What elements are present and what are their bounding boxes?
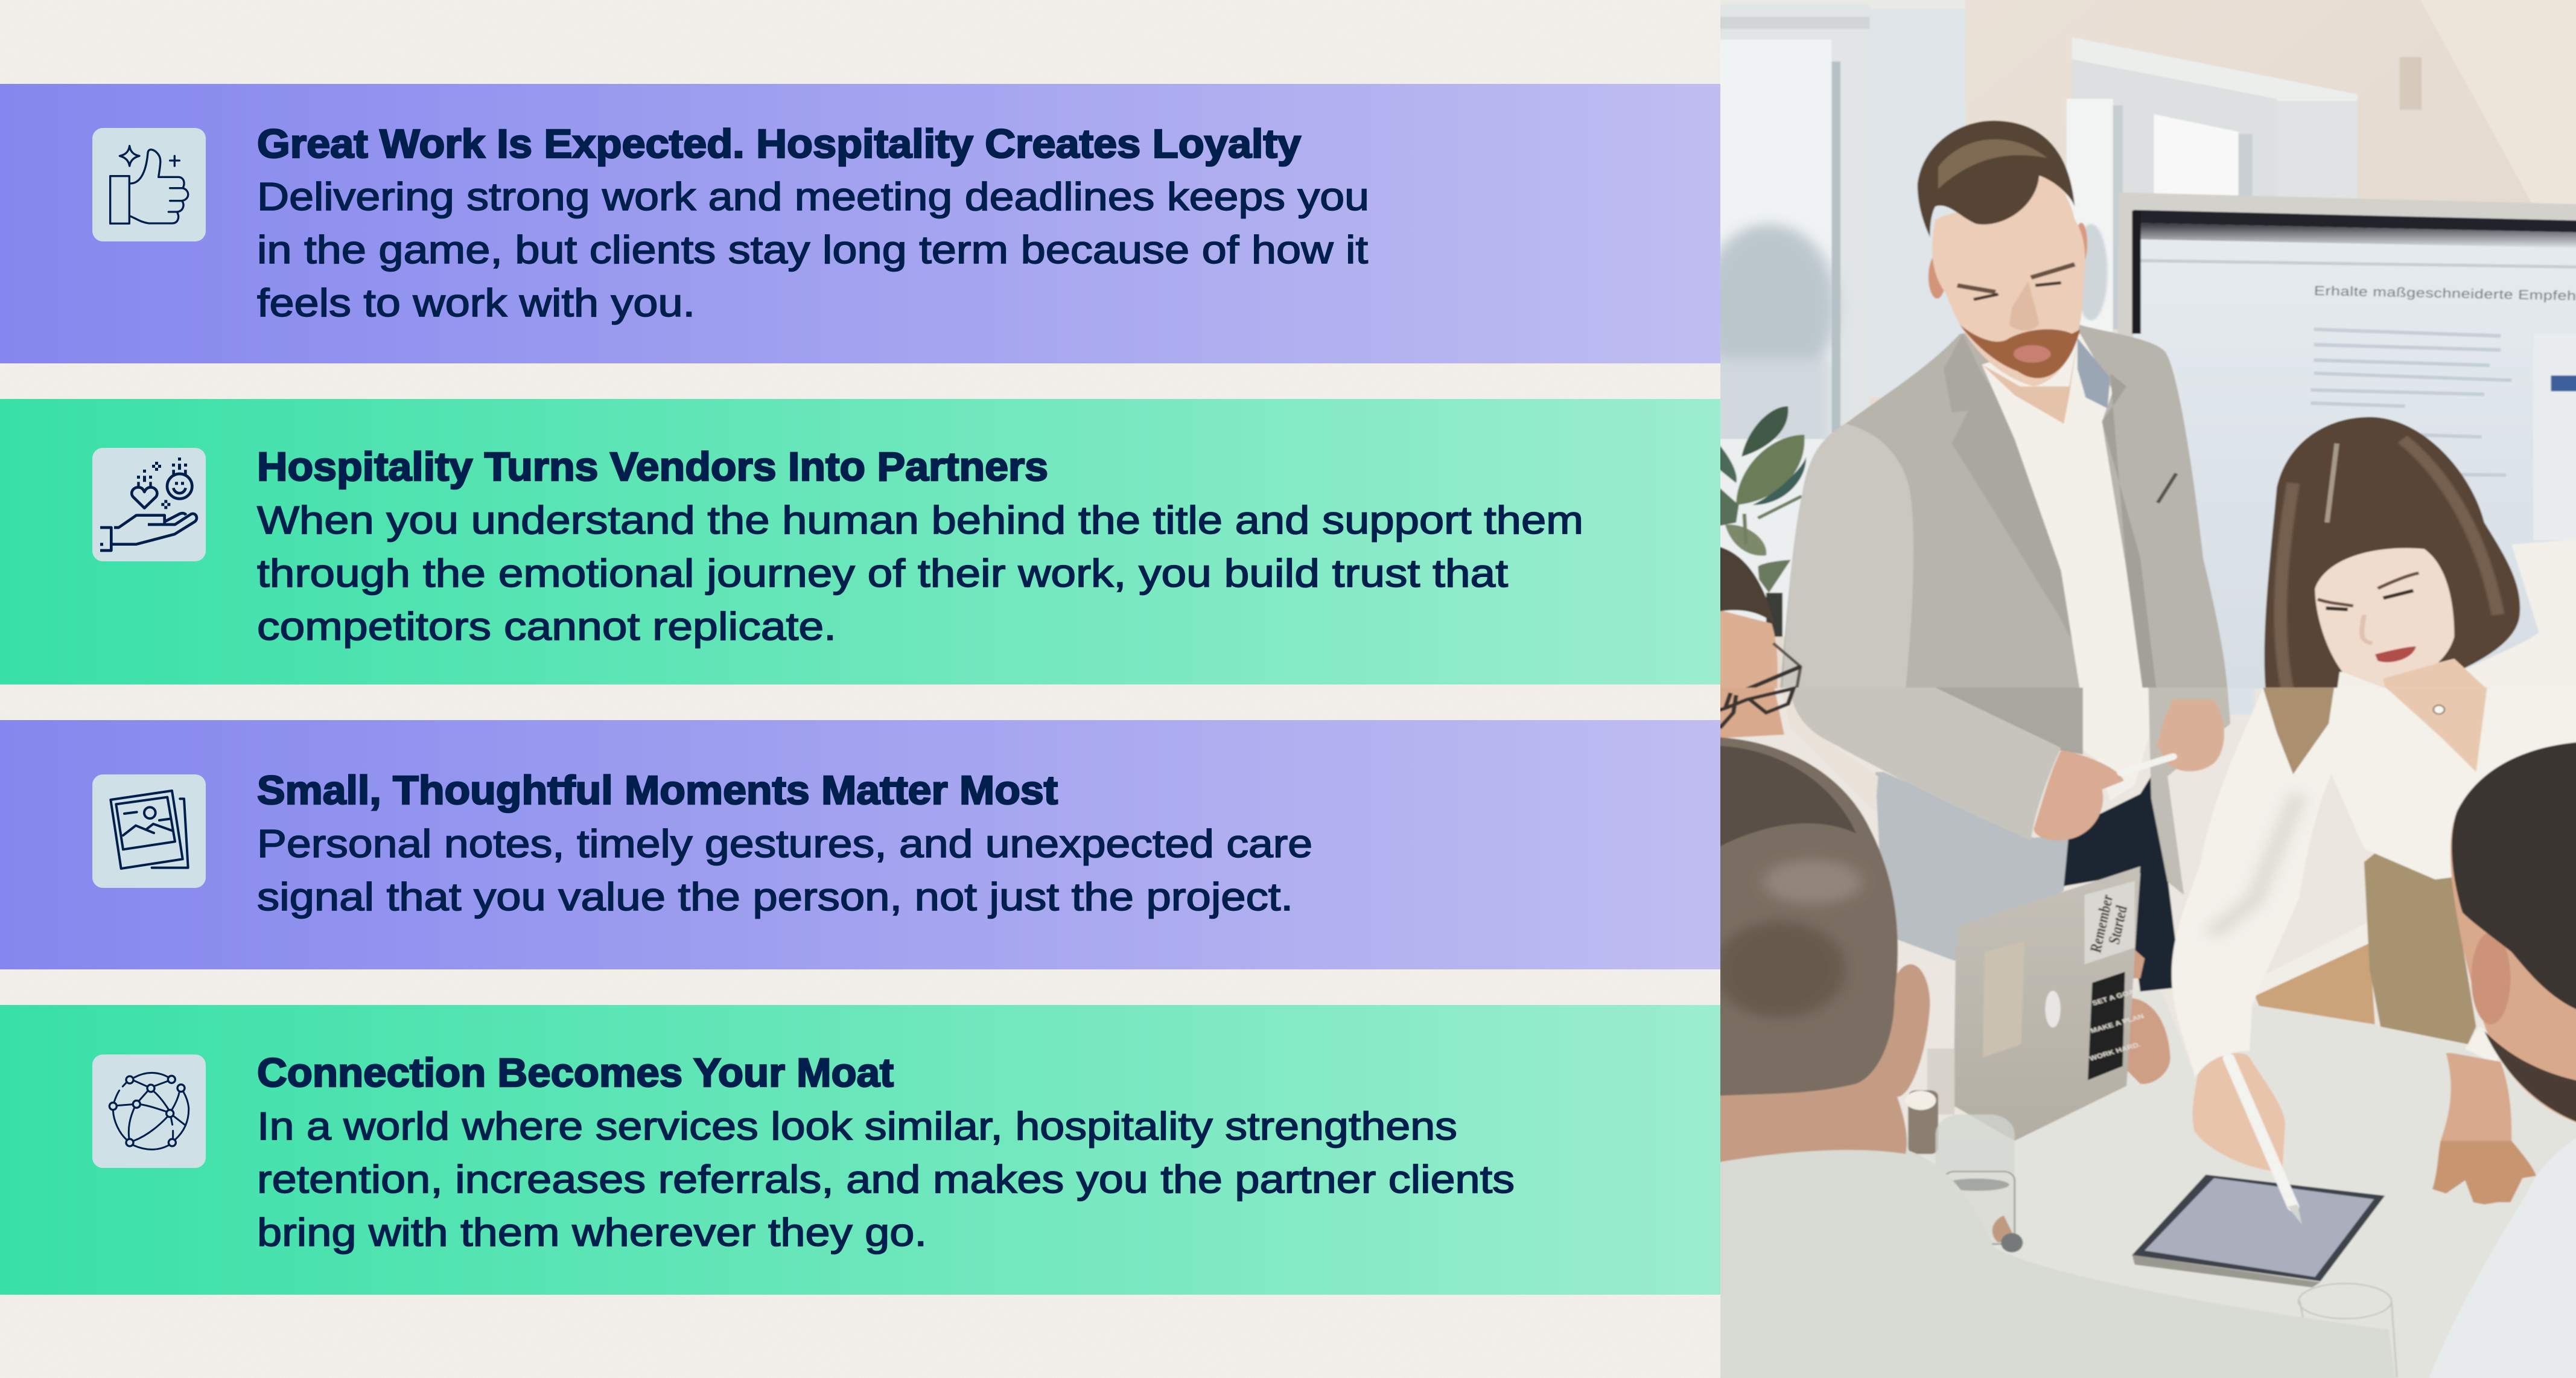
heading: connection moat: Connection Becomes Your Moat xyxy=(257,1050,894,1096)
icon: thumbs up xyxy=(92,128,206,241)
monitor: Erhalte maßgeschneiderte Empfeh xyxy=(2314,284,2576,304)
man with glasses, lower part xyxy=(1703,687,1793,739)
laptop with stickers xyxy=(1927,866,2171,1141)
text block: thoughtful moments body: signal that you value the person, not just the project. xyxy=(257,875,1293,919)
man with glasses, upper part xyxy=(1720,546,1803,689)
blouse and trousers of woman xyxy=(2172,687,2576,1077)
middle window xyxy=(2067,37,2358,331)
panel: great work is expected xyxy=(0,84,1720,363)
blazer sleeve, trousers and hands xyxy=(1780,687,2230,992)
tablet and stylus xyxy=(2132,1053,2536,1287)
text block: great work body: in the game, but clients stay long term because of how it xyxy=(257,228,1368,272)
icon: network globe xyxy=(92,1054,206,1168)
table xyxy=(1703,987,2576,1378)
laptop with stickers: Started xyxy=(2105,904,2131,945)
text block: great work body: feels to work with you. xyxy=(257,281,695,325)
heading: vendors into partners: Hospitality Turns Vendors Into Partners xyxy=(257,444,1048,490)
panel: connection moat xyxy=(0,1005,1720,1295)
text block: vendors body: competitors cannot replicate. xyxy=(257,604,836,648)
text block: connection body xyxy=(257,1104,1515,1254)
text block: connection body: bring with them wherever they go. xyxy=(257,1210,927,1254)
lower scene xyxy=(1703,687,2576,1378)
laptop with stickers: SET A GOAL xyxy=(2091,986,2141,1007)
icon: photo prints xyxy=(92,774,206,888)
monitor xyxy=(2116,193,2576,694)
far wall and floor xyxy=(1703,687,2576,1378)
text block: thoughtful moments body: Personal notes, timely gestures, and unexpected care xyxy=(257,821,1312,866)
icon: hand with heart and smiley xyxy=(92,448,206,561)
text block: vendors body: When you understand the human behind the title and support them xyxy=(257,498,1583,542)
laptop with stickers: MAKE A PLAN xyxy=(2089,1012,2145,1035)
panel: thoughtful moments xyxy=(0,720,1720,969)
text block: connection body: In a world where services look similar, hospitality strengthens xyxy=(257,1104,1457,1148)
paper background xyxy=(0,0,1720,1378)
man from behind, left xyxy=(1703,737,2397,1378)
panel: vendors into partners xyxy=(0,399,1720,684)
laptop with stickers: Remember xyxy=(2087,893,2117,954)
text block: vendors body: through the emotional journey of their work, you build trust that xyxy=(257,551,1508,595)
man from behind, right xyxy=(2424,741,2576,1378)
man in grey blazer xyxy=(1780,121,2228,692)
text block: vendors body xyxy=(257,498,1583,648)
room background xyxy=(1703,0,2576,703)
text block: great work body: Delivering strong work and meeting deadlines keeps you xyxy=(257,174,1369,219)
text block: connection body: retention, increases referrals, and makes you the partner clients xyxy=(257,1157,1515,1201)
woman with brown hair, upper part xyxy=(2265,417,2576,692)
left window xyxy=(1698,0,1965,637)
glasses and cup xyxy=(1906,1090,2397,1377)
photo: team meeting around a tablet xyxy=(1698,0,2576,1378)
heading: thoughtful moments: Small, Thoughtful Moments Matter Most xyxy=(257,768,1058,813)
heading: great work: Great Work Is Expected. Hospitality Creates Loyalty xyxy=(257,121,1301,167)
plant xyxy=(1714,406,1806,637)
laptop with stickers: WORK HARD. xyxy=(2088,1041,2142,1062)
text block: great work body xyxy=(257,174,1369,325)
text block: thoughtful moments body xyxy=(257,821,1312,919)
